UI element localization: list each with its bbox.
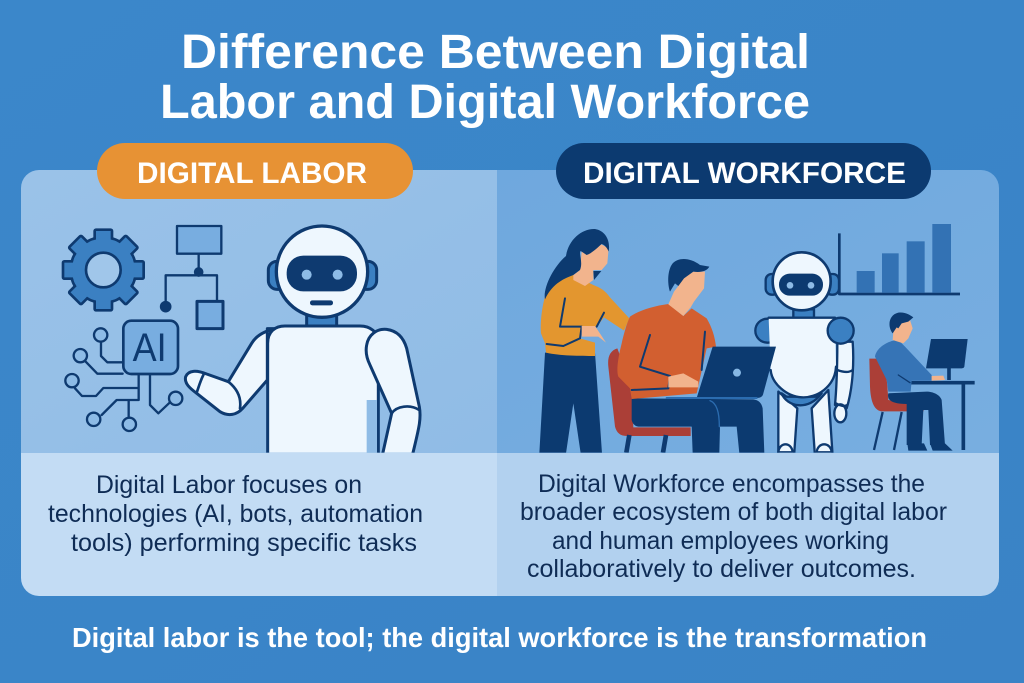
icon: AI chip circuit: AI [133, 326, 167, 370]
pill: digital labor [97, 143, 413, 199]
laptop [667, 347, 776, 398]
text: digital workforce description [520, 470, 947, 583]
icon: AI chip circuit [65, 321, 182, 431]
title [160, 26, 810, 129]
text: digital labor description [48, 471, 423, 557]
text: digital workforce description: Digital Workforce encompasses the [538, 470, 925, 498]
robot: digital labor [185, 226, 420, 458]
chair: seated worker [869, 359, 925, 411]
text: digital workforce description: broader ecosystem of both digital labor [520, 498, 947, 526]
text: digital labor description: tools) performing specific tasks [71, 529, 417, 557]
robot left arm [185, 329, 277, 415]
footer tagline: Digital labor is the tool; the digital workforce is the transformation [72, 622, 927, 653]
text: digital workforce description: collaboratively to deliver outcomes. [527, 555, 916, 583]
robot ears [266, 260, 279, 291]
panel: digital workforce [497, 170, 999, 596]
bar chart [839, 224, 960, 294]
chair: man [608, 348, 691, 453]
robot right arm [366, 329, 420, 458]
person: woman standing [539, 229, 629, 453]
robot neck [305, 316, 338, 324]
robot head [276, 226, 368, 317]
robot torso [268, 326, 378, 458]
desk and monitor [911, 339, 975, 450]
robot shading strip [367, 400, 377, 457]
text: digital labor description: Digital Labor focuses on [96, 471, 362, 499]
pill: digital workforce: DIGITAL WORKFORCE [583, 157, 906, 190]
icon: gear [63, 230, 144, 310]
text: digital labor description: technologies (AI, bots, automation [48, 500, 423, 528]
pill: digital labor: DIGITAL LABOR [137, 157, 367, 190]
robot mouth [310, 300, 333, 305]
person: seated worker [875, 312, 953, 451]
illustration: people and robot [539, 224, 975, 457]
panel: digital labor [21, 170, 497, 596]
illustration: tech icons and robot [63, 226, 420, 458]
title: Difference Between Digital [181, 26, 810, 79]
pill: digital workforce [556, 143, 931, 199]
text: digital workforce description: and human employees working [552, 527, 889, 555]
person: man seated [617, 259, 764, 453]
robot: digital workforce [755, 252, 854, 457]
robot visor [287, 256, 357, 291]
title: Labor and Digital Workforce [160, 76, 810, 129]
icon: flowchart [161, 226, 223, 329]
